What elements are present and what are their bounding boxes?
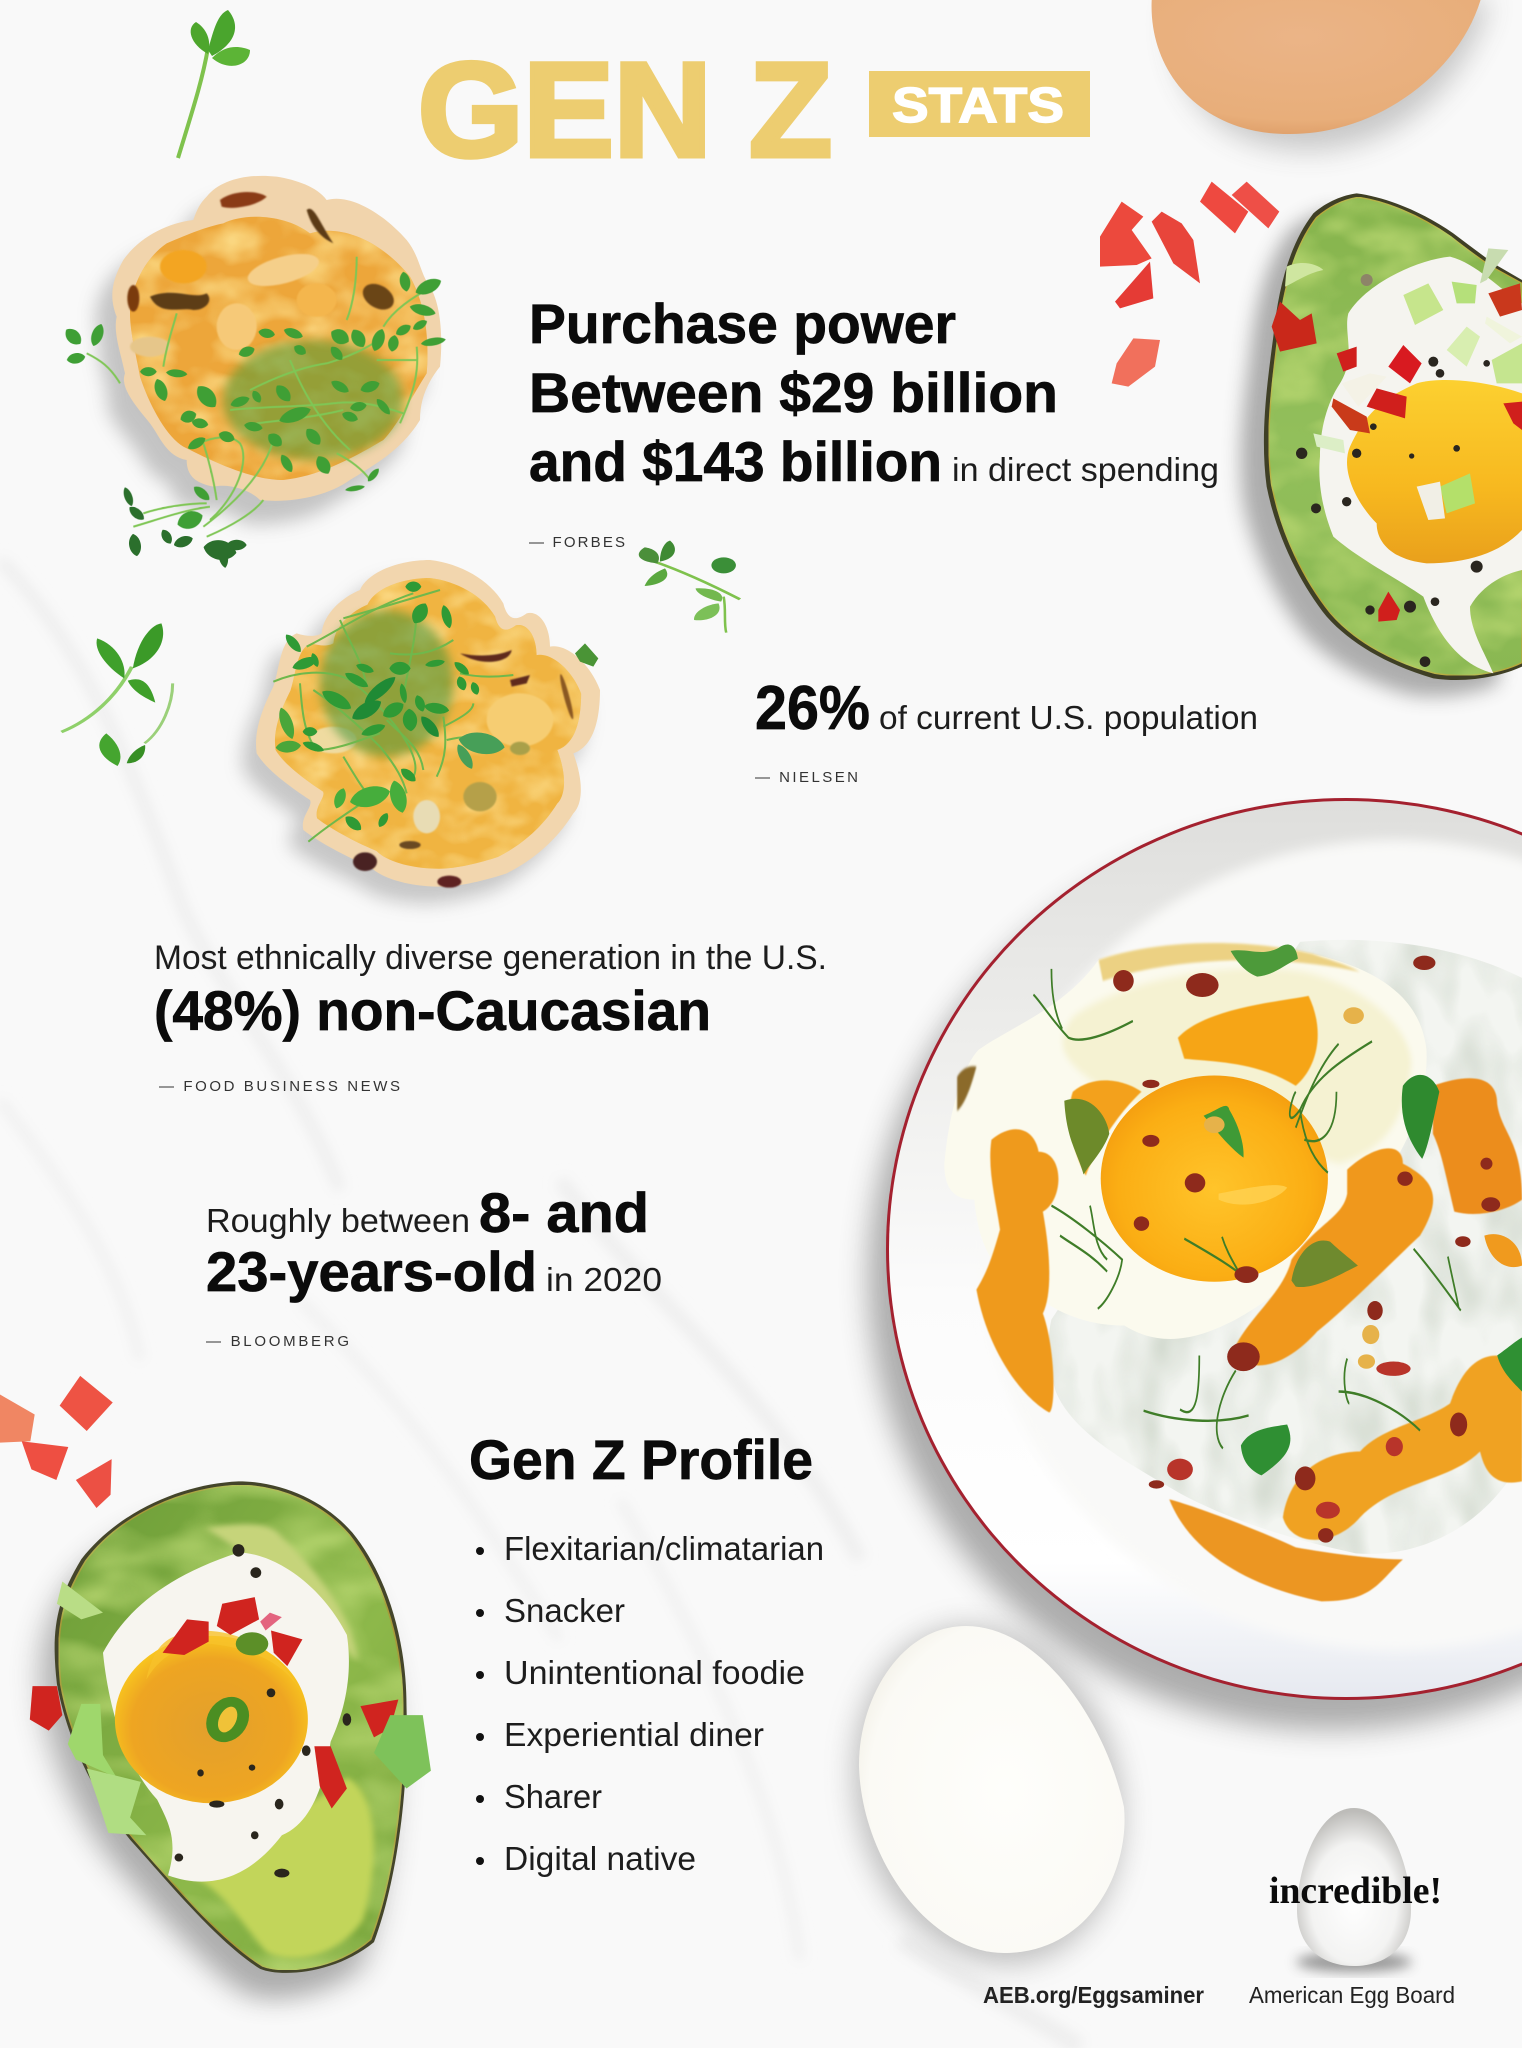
text block: population: 26%: [755, 674, 870, 743]
microgreen leaves: [62, 271, 446, 532]
oil pool bottom: [1169, 1499, 1403, 1601]
yolk: [1347, 380, 1522, 563]
icon: tomato pieces bottom left: [0, 1376, 113, 1508]
source: Forbes: — FORBES: [529, 534, 625, 551]
title: [418, 36, 1090, 185]
text block: population: of current U.S. population: [879, 699, 1258, 736]
text block: purchase power: and $143 billion: [529, 430, 942, 493]
icon: white egg: [816, 1595, 1160, 1995]
crust: [112, 176, 441, 501]
footer: American Egg Board: American Egg Board: [1249, 1982, 1455, 2008]
text block: diversity: [154, 939, 827, 1095]
avocado bottom left: [30, 1481, 431, 2000]
skin: [1264, 193, 1522, 680]
oil right: [1433, 1078, 1522, 1214]
icon: microgreen sprig top left: [178, 10, 250, 158]
title: GEN Z: [418, 36, 832, 185]
oil lower right: [1283, 1356, 1522, 1540]
text block: purchase power: Between $29 billion: [529, 361, 1058, 424]
source: Food Business News: — FOOD BUSINESS NEWS: [159, 1078, 400, 1095]
profile list: Digital native: [504, 1840, 696, 1877]
upper yolk: [1178, 996, 1318, 1086]
plate surface: [889, 801, 1522, 1697]
profile list: Snacker: [504, 1592, 625, 1629]
text block: age: Roughly between: [206, 1202, 470, 1239]
text block: age: [206, 1181, 662, 1350]
text block: diversity: (48%) non-Caucasian: [154, 979, 711, 1042]
peppers: [1272, 283, 1522, 622]
quiche bottom: [243, 560, 600, 903]
text block: purchase power: [529, 292, 1219, 551]
quiche top: [62, 176, 446, 569]
microgreen bush shade: [223, 340, 403, 460]
green onions: [1285, 248, 1522, 520]
icon: microgreen sprig left: [61, 623, 173, 766]
logo: incredible egg: incredible!: [1269, 1870, 1442, 1912]
pepper corns: [1296, 274, 1490, 667]
text block: age: 8- and: [479, 1181, 649, 1244]
oil left: [976, 1129, 1058, 1412]
icon: tomato pieces top right: [1100, 182, 1279, 387]
oil streak: [1231, 1148, 1433, 1365]
text block: population: [755, 674, 1258, 786]
text block: gen z profile: Gen Z Profile: [469, 1428, 813, 1491]
filling: [275, 578, 581, 869]
icon: brown egg: [1152, 0, 1490, 150]
profile list: Flexitarian/climatarian: [504, 1530, 824, 1567]
egg white: [103, 1553, 349, 1882]
lettuce: [57, 1582, 431, 1835]
plate with fried egg: [868, 798, 1522, 1730]
stats badge: STATS: [892, 79, 1064, 133]
flesh: [1269, 197, 1522, 675]
source: Nielsen: — NIELSEN: [755, 769, 858, 786]
avocado top right: [1241, 193, 1522, 697]
source: Bloomberg: — BLOOMBERG: [206, 1333, 349, 1350]
microgreen leaves: [275, 581, 598, 834]
herbs: [1033, 969, 1461, 1448]
stats badge: [869, 71, 1090, 137]
text block: age: in 2020: [546, 1261, 662, 1298]
text block: age: 23-years-old: [206, 1240, 537, 1303]
profile list: Sharer: [504, 1778, 602, 1815]
text block: purchase power: in direct spending: [952, 451, 1219, 488]
logo: incredible egg: [1269, 1808, 1442, 1972]
filling: [130, 217, 428, 480]
text block: diversity: Most ethnically diverse generation in the U.S.: [154, 939, 827, 977]
egg white: [1319, 257, 1522, 673]
microgreen bush shade: [320, 610, 453, 757]
yolk: [1101, 1076, 1328, 1282]
plate shadow: [868, 826, 1522, 1730]
crust: [256, 560, 600, 887]
profile list: Experiential diner: [504, 1716, 764, 1753]
skin: [55, 1481, 407, 1973]
plate rim: [886, 798, 1522, 1700]
peppers: [30, 1597, 398, 1809]
yolk: [115, 1636, 308, 1803]
fried egg white: [944, 943, 1427, 1339]
icon: microgreen sprig center: [639, 541, 740, 633]
footer: website: AEB.org/Eggsaminer: [983, 1982, 1204, 2008]
chili flakes: [1113, 956, 1500, 1543]
profile list: Unintentional foodie: [504, 1654, 805, 1691]
text block: purchase power: Purchase power: [529, 292, 956, 355]
flesh: [59, 1485, 403, 1970]
yogurt: [1049, 940, 1522, 1554]
text block: gen z profile: [469, 1428, 824, 1877]
microgreen stems: [273, 590, 513, 842]
microgreen stems: [87, 257, 430, 537]
profile list: [476, 1530, 824, 1877]
